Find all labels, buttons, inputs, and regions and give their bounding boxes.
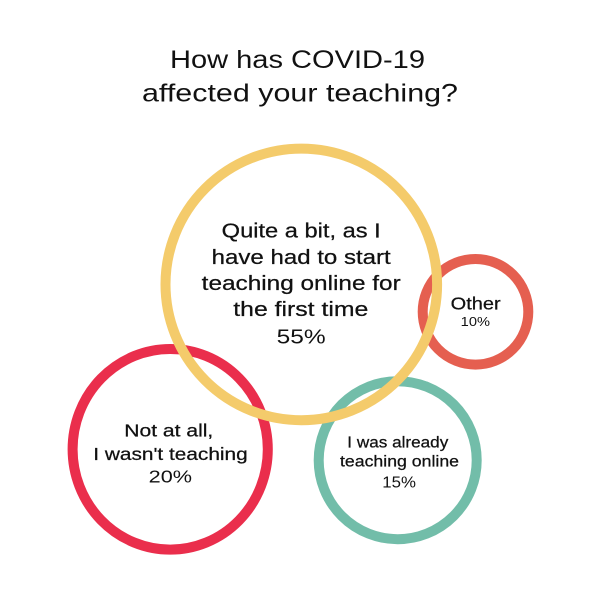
circle: Other (coral) bbox=[423, 259, 528, 365]
circle: Not at all (red) bbox=[73, 349, 268, 550]
label: Quite a bit 55%: teaching online for bbox=[202, 273, 401, 295]
label: I was already teaching online 15% bbox=[340, 435, 459, 491]
label: Not at all 20%: 20% bbox=[149, 467, 192, 487]
circle: Already teaching online (teal) bbox=[319, 381, 477, 539]
label: Quite a bit 55%: the first time bbox=[233, 299, 368, 321]
label: Other 10% bbox=[451, 293, 501, 329]
label: Not at all 20%: Not at all, bbox=[124, 421, 213, 441]
title: affected your teaching? bbox=[142, 80, 458, 108]
title bbox=[142, 46, 458, 108]
label: I was already teaching online 15%: teaching online bbox=[340, 454, 459, 471]
label: Not at all 20% bbox=[93, 421, 248, 487]
label: Quite a bit 55% bbox=[202, 220, 401, 348]
circle: Quite a bit (yellow) bbox=[165, 149, 437, 420]
label: I was already teaching online 15%: 15% bbox=[382, 474, 416, 491]
title: How has COVID-19 bbox=[170, 46, 425, 74]
label: Quite a bit 55%: have had to start bbox=[212, 247, 391, 269]
label: Other 10%: 10% bbox=[461, 314, 490, 329]
label: Other 10%: Other bbox=[451, 293, 501, 313]
label: Quite a bit 55%: Quite a bit, as I bbox=[222, 220, 381, 242]
label: Not at all 20%: I wasn't teaching bbox=[93, 444, 248, 464]
label: I was already teaching online 15%: I was already bbox=[347, 435, 449, 452]
label: Quite a bit 55%: 55% bbox=[277, 326, 326, 348]
